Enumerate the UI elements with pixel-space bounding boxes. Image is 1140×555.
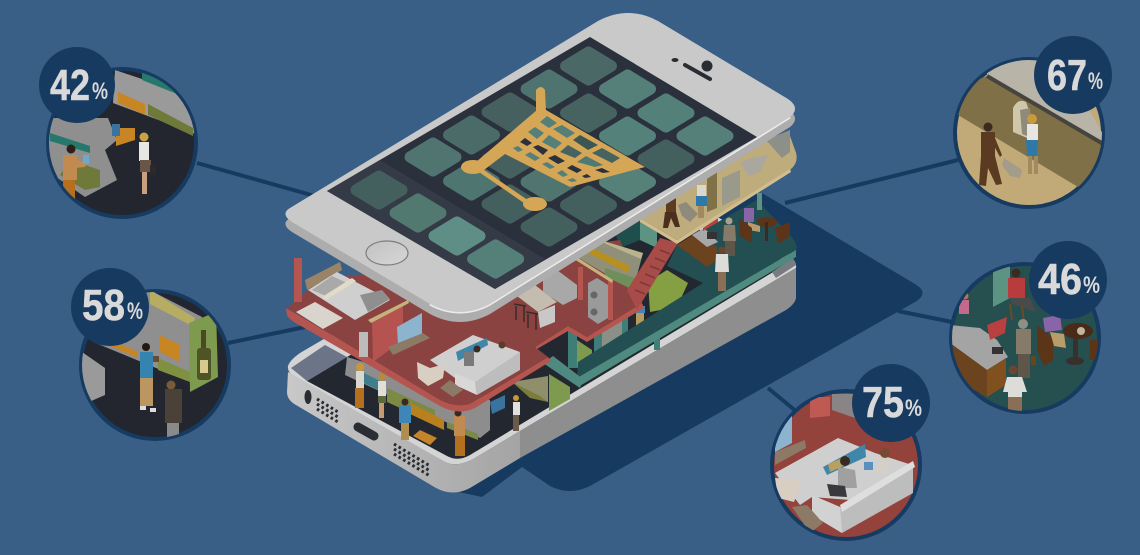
sofa back — [475, 352, 520, 395]
red columns — [578, 267, 613, 320]
percent badge 75: 75 — [862, 378, 904, 427]
scene circle — [48, 69, 196, 217]
partition — [707, 172, 717, 212]
scene circle — [951, 264, 1099, 412]
earpiece — [685, 65, 710, 79]
percent badge 67: 67 — [1047, 51, 1087, 100]
scene circle — [772, 391, 920, 539]
percent badge 42 — [39, 47, 115, 123]
seated woman — [744, 208, 760, 232]
plate edge highlight — [430, 117, 790, 312]
bed pillows — [312, 276, 347, 296]
bed headboard — [305, 262, 342, 290]
shopper man tan — [454, 410, 465, 456]
callout: 46% cafe — [950, 241, 1107, 414]
counter top — [692, 228, 718, 247]
person with tablet — [498, 342, 506, 348]
lounge rug — [430, 335, 520, 386]
percent badge 58 — [71, 268, 149, 346]
callout: 75% living room — [772, 364, 930, 539]
cafe table — [757, 217, 777, 241]
woman in blue skirt — [696, 185, 707, 218]
app tiles — [356, 52, 728, 273]
percent badge 42: 42 — [50, 61, 90, 110]
shopper man blue — [399, 398, 411, 440]
kitchen island base — [538, 305, 555, 328]
blue display items — [490, 395, 505, 414]
case interior floor — [307, 200, 788, 459]
phone: top plate — [285, 13, 795, 322]
percent badge 67: % — [1088, 68, 1103, 95]
hand truck — [678, 202, 698, 222]
floor step edge — [535, 303, 644, 349]
cafe counter and customers — [677, 208, 790, 291]
stove — [722, 170, 740, 206]
lower teal stairs — [543, 356, 583, 388]
headphone jack — [304, 390, 312, 404]
phone drop shadow — [440, 193, 922, 497]
percent badge 46: % — [1083, 272, 1100, 299]
phone: bottom case — [287, 165, 796, 492]
customer in grey — [723, 218, 736, 256]
kitchen island — [513, 285, 557, 312]
person on sofa — [464, 346, 480, 366]
red upper floor with apartment — [286, 238, 678, 412]
scene contents — [775, 394, 915, 533]
lightning port — [358, 427, 374, 436]
mid shelves seen below red floor — [596, 320, 622, 352]
washer dryer — [588, 278, 608, 324]
cart wheels — [461, 160, 547, 211]
case rim — [288, 165, 796, 464]
TV — [397, 313, 422, 345]
dock strip — [327, 160, 545, 289]
percent badge 58: % — [127, 298, 143, 325]
home button — [366, 241, 408, 265]
cart mesh holes — [513, 116, 620, 182]
door — [359, 332, 368, 357]
teal back wall — [612, 218, 640, 248]
green fixture — [648, 270, 688, 312]
scene contents — [950, 266, 1099, 414]
teal panel — [640, 220, 657, 248]
case inner wall — [291, 345, 347, 381]
teal floor edge — [577, 250, 796, 387]
lower floor: store shelves and shoppers — [345, 270, 688, 456]
bar stools — [514, 304, 538, 330]
scene contents — [46, 70, 196, 200]
side table — [440, 380, 463, 397]
lounge chair — [740, 155, 768, 176]
partition top — [368, 300, 409, 323]
connector lines — [197, 160, 958, 412]
teal mid floor with pillars — [543, 193, 797, 388]
sofa end — [455, 373, 477, 395]
green display — [577, 340, 592, 368]
callout: 58% wine display — [71, 268, 229, 441]
scene circle — [81, 291, 229, 439]
case right side — [520, 268, 796, 458]
percent badge 75 — [852, 364, 930, 442]
teal floor surface — [577, 200, 797, 378]
cafe chairs — [739, 218, 790, 244]
man under stairs — [636, 306, 645, 327]
sensor dot — [672, 58, 678, 62]
rug — [296, 302, 343, 329]
plate face — [285, 13, 795, 312]
lounge wall screen — [456, 338, 488, 361]
red sign — [703, 218, 718, 231]
screen — [327, 37, 757, 289]
scene circle — [955, 59, 1103, 207]
bed blanket stripe — [322, 278, 356, 300]
cart lower frame — [480, 170, 528, 203]
register — [707, 232, 717, 239]
percent badge 46 — [1029, 241, 1107, 319]
bed shadow — [360, 290, 390, 312]
percent badge 46: 46 — [1038, 255, 1082, 304]
partition wall — [372, 303, 403, 362]
right shelves — [512, 376, 548, 402]
left speaker holes — [317, 399, 338, 422]
callout: 42% shopper in aisle — [39, 47, 196, 217]
percent badge 75: % — [905, 395, 922, 422]
percent badge 42: % — [92, 78, 108, 105]
scene contents — [958, 60, 1102, 187]
teal side panel — [757, 193, 762, 210]
right speaker holes — [394, 444, 430, 476]
tan top floor — [640, 130, 797, 244]
floor edge — [286, 308, 551, 412]
tan floor edge — [640, 169, 791, 244]
white chair — [417, 362, 445, 386]
teal pillars — [568, 315, 660, 368]
customer in white — [715, 246, 729, 291]
plate thickness — [285, 23, 795, 322]
callout: 67% delivery — [950, 36, 1112, 207]
front camera — [702, 60, 712, 72]
percent badge 58: 58 — [82, 281, 125, 330]
shopper woman 2 — [378, 374, 386, 418]
red post — [294, 258, 302, 302]
case left side — [287, 372, 520, 492]
red stairs — [627, 238, 678, 310]
percent badge 67 — [1034, 36, 1112, 114]
cart shadow holes — [520, 138, 610, 178]
tan floor — [640, 136, 797, 240]
shelf produce — [387, 388, 435, 424]
kitchen cabinets — [543, 270, 577, 305]
floor surface — [287, 240, 642, 405]
inner end wall — [772, 258, 796, 278]
green banner — [549, 374, 570, 411]
shopper woman right — [513, 395, 520, 431]
cart handle — [536, 87, 546, 112]
shopping cart icon — [461, 87, 645, 211]
shopper woman 1 — [355, 363, 364, 408]
shelf unit — [766, 130, 790, 158]
mid-level shelves — [574, 240, 643, 290]
basket display — [413, 430, 437, 445]
bed — [308, 272, 390, 320]
cart basket — [476, 110, 645, 187]
TV stand — [388, 333, 430, 355]
scene contents — [82, 285, 218, 441]
shelving back — [345, 357, 490, 438]
delivery man — [663, 198, 680, 228]
brown counter — [677, 235, 717, 267]
